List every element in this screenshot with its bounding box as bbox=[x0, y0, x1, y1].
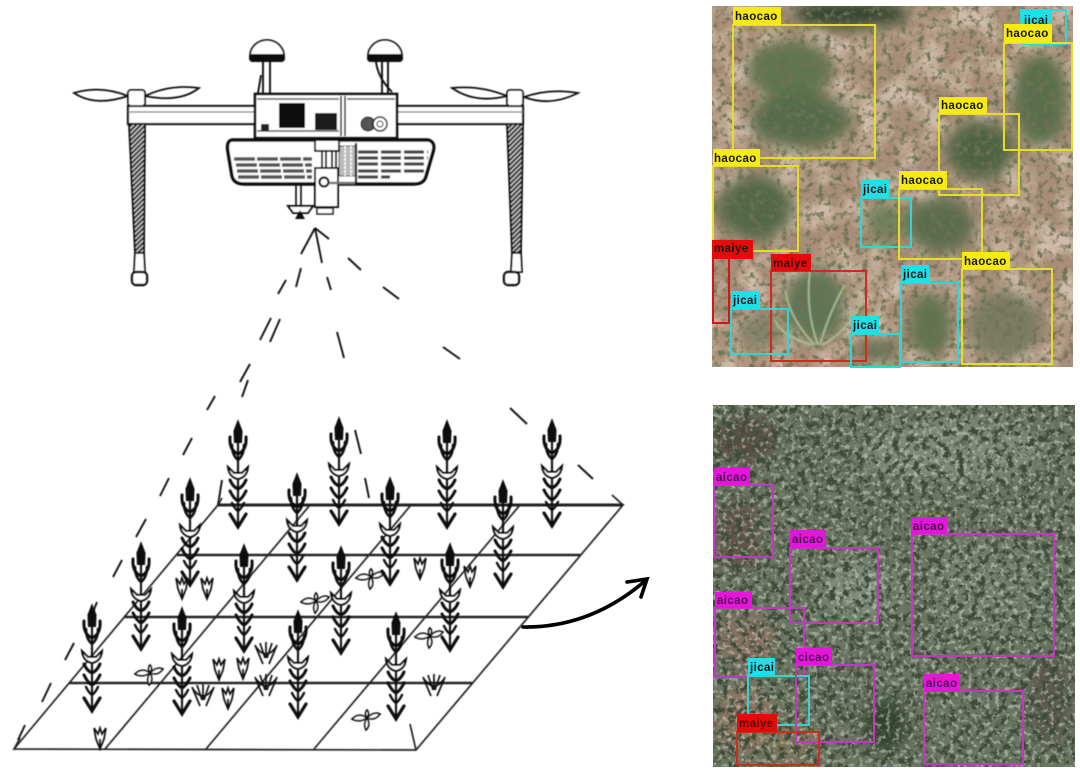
detection: maiye bbox=[771, 254, 866, 361]
detection: jicai: jicai bbox=[749, 662, 774, 674]
detection: haocao: haocao bbox=[1006, 28, 1049, 40]
dashed field-of-view lines bbox=[18, 228, 593, 740]
detection: haocao: haocao bbox=[901, 175, 944, 187]
photo: top detection result bbox=[712, 0, 1073, 367]
detection: aicao bbox=[790, 530, 878, 623]
detection: haocao bbox=[899, 171, 982, 259]
weed seedlings bbox=[94, 558, 476, 749]
detection: haocao bbox=[939, 97, 1019, 195]
detection: aicao bbox=[911, 517, 1054, 656]
left leg bbox=[129, 124, 147, 285]
crop plants bbox=[82, 419, 562, 719]
detection: haocao bbox=[962, 252, 1052, 364]
detection: cicao bbox=[796, 648, 874, 742]
detection: maiye: maiye bbox=[739, 718, 774, 730]
drone bbox=[74, 40, 578, 285]
camera gimbal bbox=[315, 140, 355, 214]
left antenna bbox=[249, 40, 285, 93]
detection: jicai: jicai bbox=[902, 269, 927, 281]
detection: maiye: maiye bbox=[773, 258, 808, 270]
detection: haocao: haocao bbox=[735, 11, 778, 23]
detection: haocao: haocao bbox=[941, 100, 984, 112]
detection: aicao: aicao bbox=[792, 534, 823, 546]
tank bbox=[228, 140, 434, 184]
right propeller bbox=[452, 87, 578, 106]
detection: jicai: jicai bbox=[852, 320, 877, 332]
detection: haocao bbox=[733, 7, 875, 158]
detection: aicao: aicao bbox=[716, 472, 747, 484]
detection: maiye bbox=[737, 714, 819, 765]
detection: aicao bbox=[924, 674, 1023, 764]
detection: haocao: haocao bbox=[964, 256, 1007, 268]
detection: jicai: jicai bbox=[862, 184, 887, 196]
control box bbox=[255, 94, 397, 138]
detections: top photo bbox=[712, 7, 1072, 367]
detection: haocao: haocao bbox=[714, 153, 757, 165]
detection: maiye bbox=[712, 240, 753, 323]
field grid bbox=[14, 495, 623, 750]
curved arrow bbox=[523, 579, 647, 627]
detection: cicao: cicao bbox=[798, 652, 829, 664]
detection: jicai bbox=[1021, 10, 1066, 44]
grass blades bbox=[775, 270, 862, 345]
detection: aicao: aicao bbox=[913, 521, 944, 533]
detection: jicai bbox=[851, 316, 900, 367]
detection: aicao bbox=[715, 592, 804, 677]
detection: jicai: jicai bbox=[732, 295, 757, 307]
detection: jicai: jicai bbox=[1023, 15, 1048, 27]
photo: bottom detection result bbox=[713, 405, 1075, 767]
detection: jicai bbox=[861, 180, 911, 247]
left propeller bbox=[74, 87, 199, 106]
detection: haocao bbox=[1004, 24, 1072, 150]
detection: jicai bbox=[748, 658, 809, 725]
detections: bottom photo bbox=[714, 468, 1054, 765]
downward sensor bbox=[288, 185, 313, 219]
detection: aicao: aicao bbox=[717, 595, 748, 607]
right leg bbox=[504, 124, 523, 285]
detection: jicai bbox=[731, 291, 788, 354]
detection: maiye: maiye bbox=[714, 243, 749, 255]
right antenna bbox=[367, 40, 403, 93]
arm bbox=[128, 106, 523, 124]
detection: haocao bbox=[713, 149, 798, 251]
detection: aicao: aicao bbox=[926, 678, 957, 690]
detection: aicao bbox=[714, 468, 773, 557]
detection: jicai bbox=[901, 265, 958, 362]
